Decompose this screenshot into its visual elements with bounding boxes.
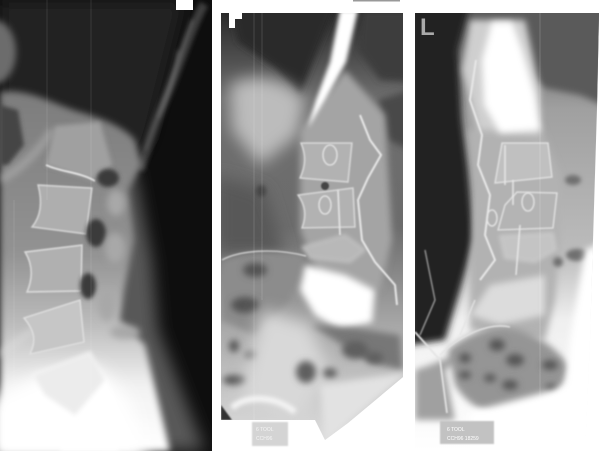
- vertebra 3: [25, 245, 82, 292]
- marker L: L: [420, 14, 435, 41]
- panel: oblique radiograph, right: [415, 13, 599, 426]
- spine column: [468, 125, 560, 340]
- label plate right: [440, 421, 494, 444]
- bright lines of ilium: [415, 250, 510, 413]
- label plate middle: CCH96: [256, 436, 273, 442]
- femoral head: [232, 399, 295, 412]
- lower spine light block: [470, 275, 545, 325]
- panel: oblique radiograph, middle: [215, 5, 410, 445]
- vertebra C: [500, 233, 556, 262]
- light lower abdomen: [240, 310, 330, 420]
- streaks: [539, 13, 541, 440]
- vertical scan streaks: [14, 0, 92, 302]
- spine column: [300, 70, 392, 290]
- liver density: [230, 78, 305, 165]
- iliac bowel region: [448, 327, 568, 414]
- torso tissue: [0, 91, 170, 451]
- upper spine haze: [462, 20, 540, 135]
- left upper soft tissue blob: [0, 20, 16, 84]
- dark sacral bowel: [312, 325, 403, 370]
- bright thoracolumbar block: [482, 22, 540, 133]
- gas bubble: [256, 185, 266, 197]
- lower bright pelvis: [0, 365, 150, 451]
- label plate middle: 6 TOOL: [256, 427, 274, 433]
- left gas shadow: [0, 105, 24, 165]
- vertebra A: [300, 143, 352, 182]
- posterior soft tissue haze: [117, 172, 210, 451]
- corner marker middle: [229, 13, 242, 28]
- lower right light: [320, 370, 403, 434]
- dark lung region: [235, 22, 326, 94]
- vertebra C: [302, 235, 365, 262]
- lower white area: [470, 375, 601, 451]
- vertebra 2: [32, 185, 92, 234]
- dark left column: [410, 5, 474, 345]
- vertebra 4: [24, 300, 84, 354]
- iliac crest line: [222, 251, 306, 260]
- vertebra B: [298, 188, 355, 228]
- panel: lateral lumbar radiograph: [0, 0, 212, 451]
- vertebra B: [498, 192, 557, 230]
- pedicle rings and facet lines: [319, 115, 397, 305]
- upper air region: [0, 0, 184, 150]
- bright anterior spine strip: [308, 10, 358, 128]
- vertebra 1: [46, 122, 112, 181]
- neural foramina: [80, 169, 119, 299]
- lower left grey tissue: [415, 345, 480, 420]
- facet lines: [470, 60, 534, 280]
- top edge shading: [353, 0, 400, 2]
- streaks: [254, 13, 262, 420]
- small gas bubbles right: [553, 175, 588, 267]
- bowel gas in left abdomen: [221, 252, 306, 335]
- upper right dark: [360, 13, 403, 84]
- upper right lung: [520, 5, 601, 108]
- label plate right: 6 TOOL: [447, 427, 465, 433]
- bright lumbosacral density: [300, 265, 375, 330]
- spinous processes: [98, 190, 140, 339]
- white corner marker: [176, 0, 193, 10]
- label plate right: CCH96 18259: [447, 436, 479, 442]
- mid abdomen dark band: [215, 175, 285, 255]
- vertebra A: [495, 143, 552, 183]
- vertebra 5: [33, 352, 105, 415]
- skin fold band: [140, 4, 204, 170]
- label plate middle: [252, 422, 288, 446]
